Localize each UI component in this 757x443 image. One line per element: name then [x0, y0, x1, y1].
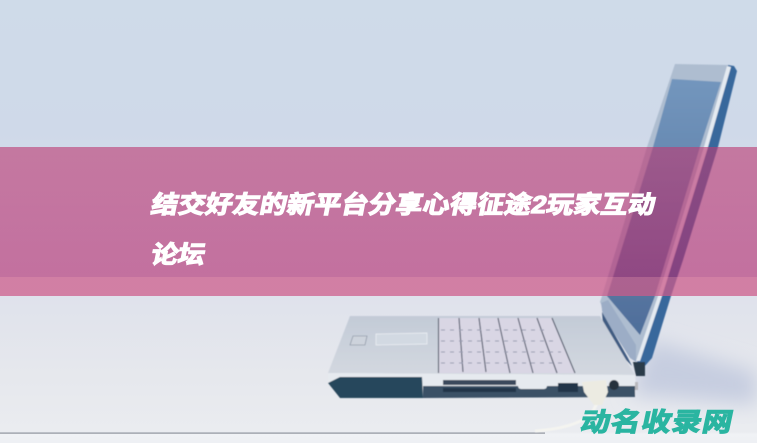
- laptop front edge: [328, 373, 636, 398]
- keyboard: [438, 318, 575, 373]
- laptop base deck: [328, 316, 635, 375]
- vents: [443, 380, 516, 392]
- side connector: [635, 382, 638, 390]
- pink band: [0, 147, 757, 296]
- power jack: [609, 380, 619, 390]
- power button: [518, 383, 547, 389]
- title: 论坛: [149, 240, 208, 269]
- touchpad buttons: [350, 336, 367, 345]
- port: [558, 383, 578, 392]
- title: [149, 190, 658, 269]
- title: 结交好友的新平台分享心得征途2玩家互动: [149, 190, 658, 219]
- cable: [535, 380, 608, 431]
- laptop shadow: [630, 340, 757, 405]
- front dark panel: [328, 377, 423, 398]
- touchpad: [376, 333, 427, 345]
- watermark: 动名收录网: [578, 408, 736, 437]
- horizon line: [0, 432, 545, 434]
- laptop: [328, 64, 737, 431]
- laptop lid: [600, 64, 737, 376]
